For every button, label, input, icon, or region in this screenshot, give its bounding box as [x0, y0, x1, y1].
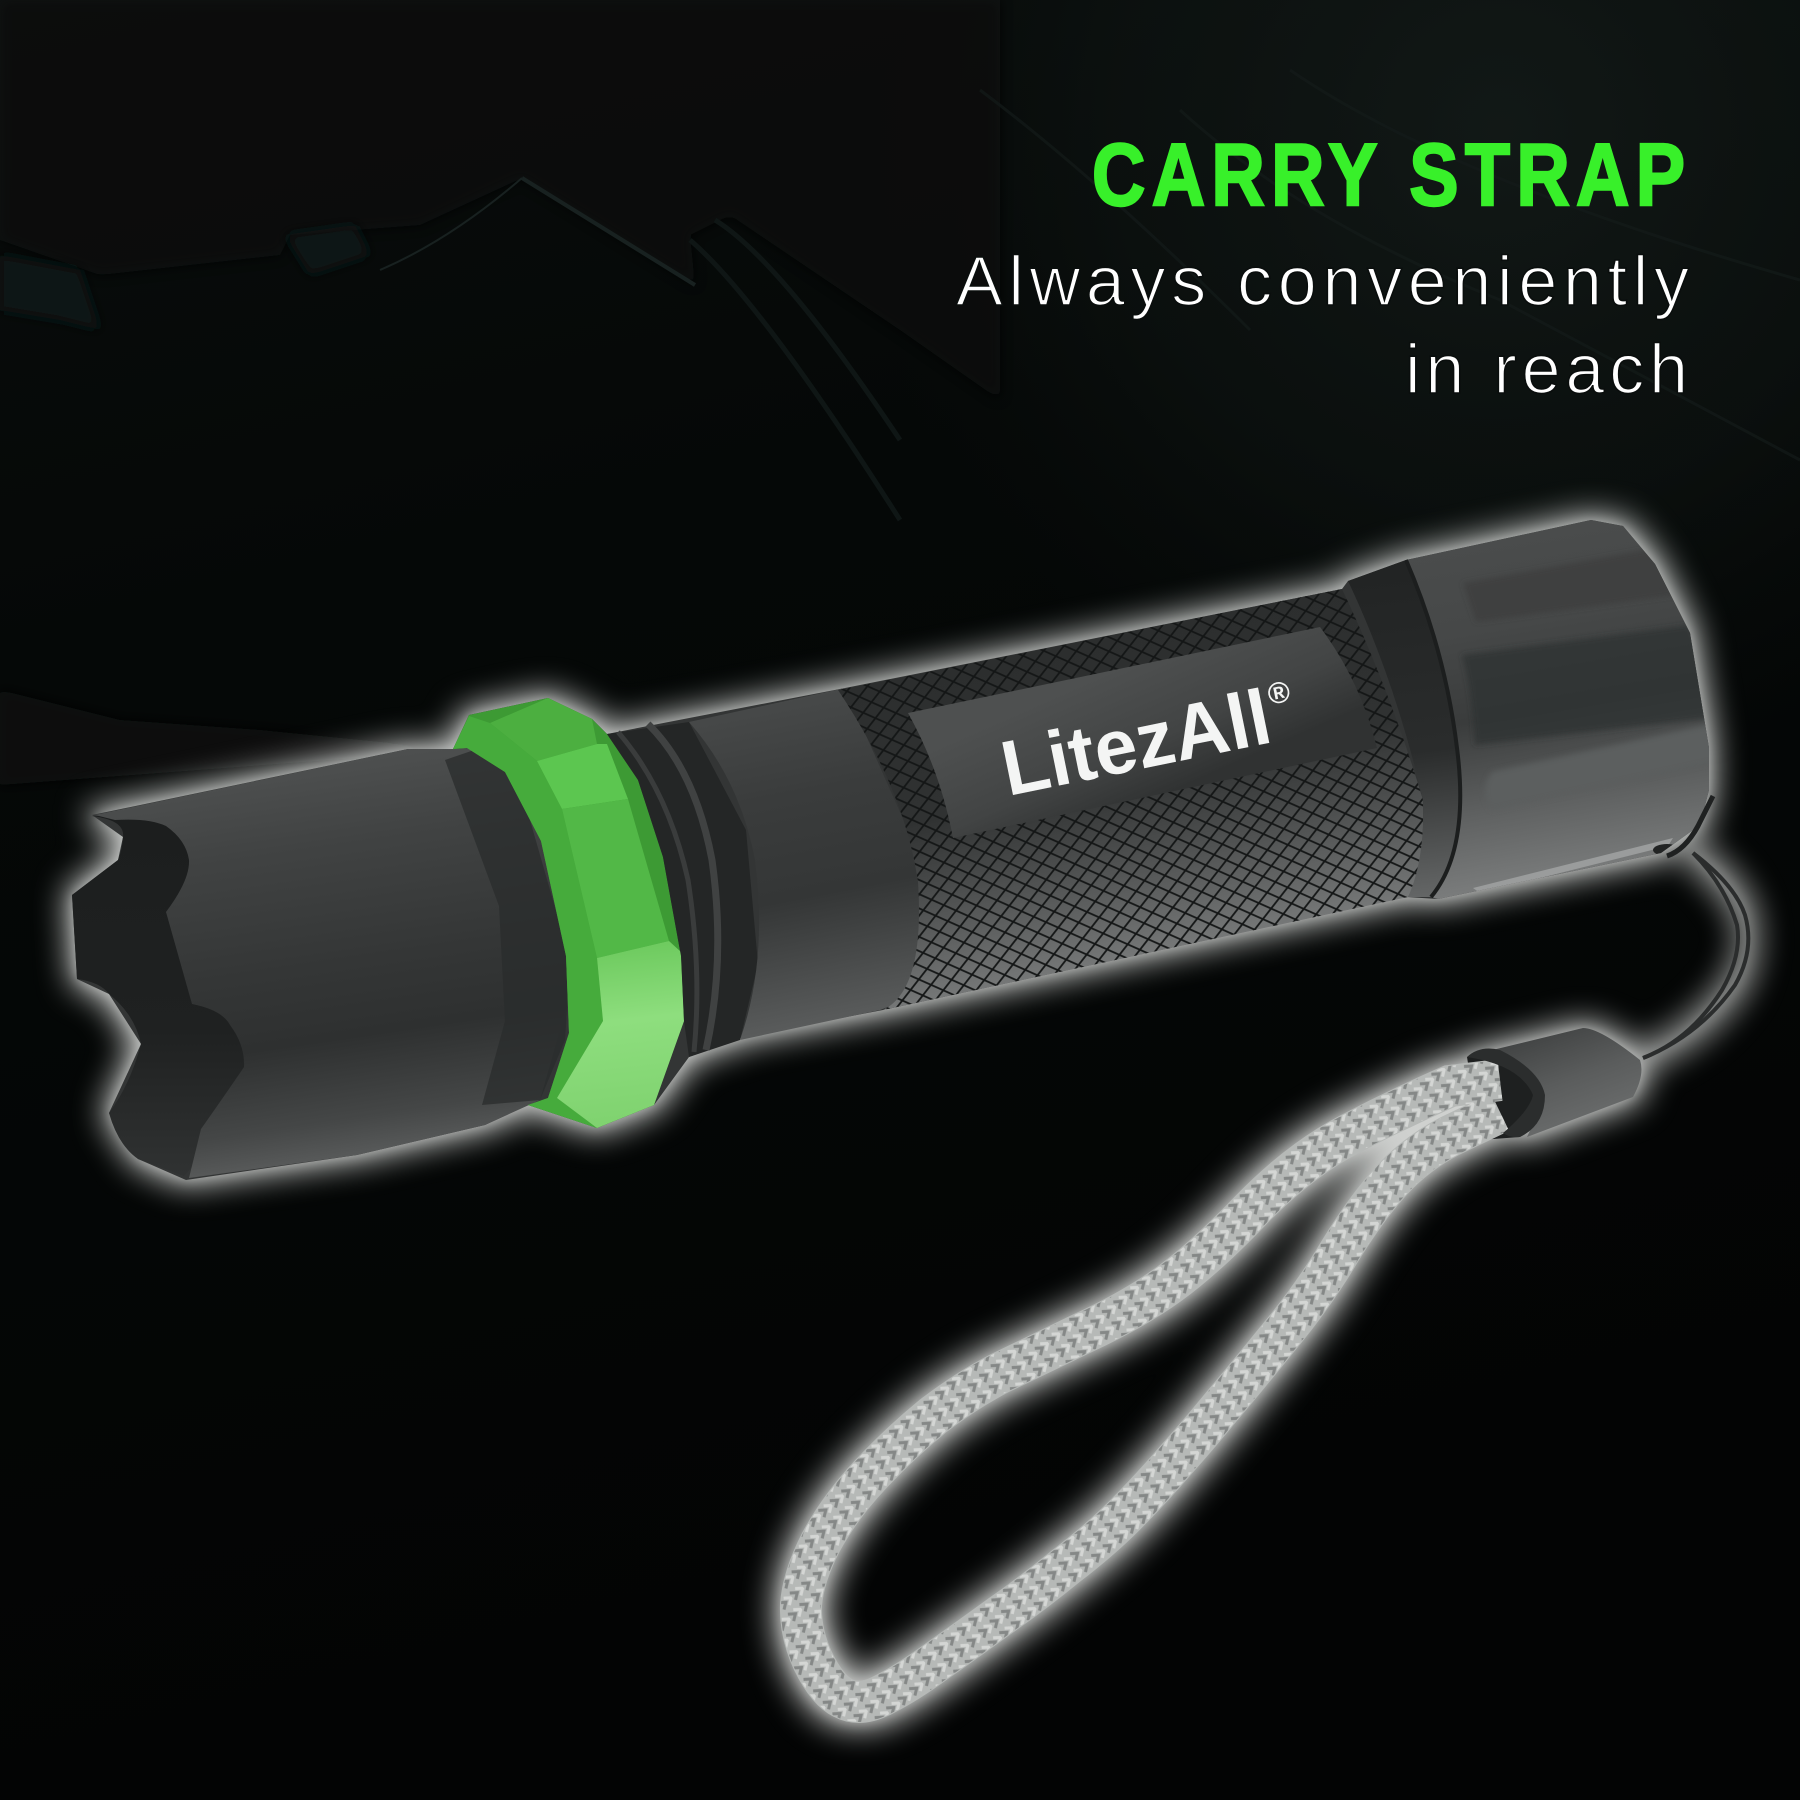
strap ferrule	[1467, 1028, 1641, 1137]
subheading: always conveniently in reach	[956, 242, 1689, 408]
collar dark seam	[1406, 560, 1460, 897]
ring lower facet	[557, 941, 684, 1128]
rubber grooved neck	[607, 722, 758, 1057]
braided cord loop	[801, 1080, 1500, 1702]
flashlight	[72, 520, 1720, 1180]
tail collar	[1348, 560, 1460, 897]
flashlight head body	[95, 745, 580, 1178]
barrel neck	[689, 688, 930, 1040]
ring top facet	[490, 698, 597, 761]
subheading: always conveniently in reach: Always conveniently	[956, 242, 1689, 320]
carry strap	[801, 853, 1748, 1702]
subheading: always conveniently in reach: in reach	[1405, 330, 1688, 408]
knurled grip	[838, 589, 1423, 1010]
ring chamfer	[453, 716, 603, 1128]
ring middle facet	[562, 799, 669, 958]
string knot at tail cap	[1667, 796, 1713, 856]
base silhouette	[72, 520, 1709, 1180]
thin double string to flashlight	[1643, 853, 1748, 1058]
cap flutes	[1462, 548, 1720, 893]
cap lower highlight	[1473, 838, 1673, 893]
product halo glow	[72, 520, 1748, 1702]
logo: LitezAll: ®	[1265, 675, 1293, 712]
smooth logo panel	[908, 627, 1377, 838]
head shadow band	[445, 748, 570, 1105]
ring upper facet	[537, 744, 628, 809]
front bezel interior	[72, 815, 250, 1176]
logo: LitezAll: LitezAll	[994, 672, 1278, 813]
heading: carry strap: CARRY STRAP	[1092, 126, 1685, 224]
ferrule mouth	[1467, 1055, 1545, 1140]
green focus ring	[453, 698, 684, 1128]
tail cap	[1406, 520, 1720, 899]
strap hole	[1653, 844, 1673, 854]
